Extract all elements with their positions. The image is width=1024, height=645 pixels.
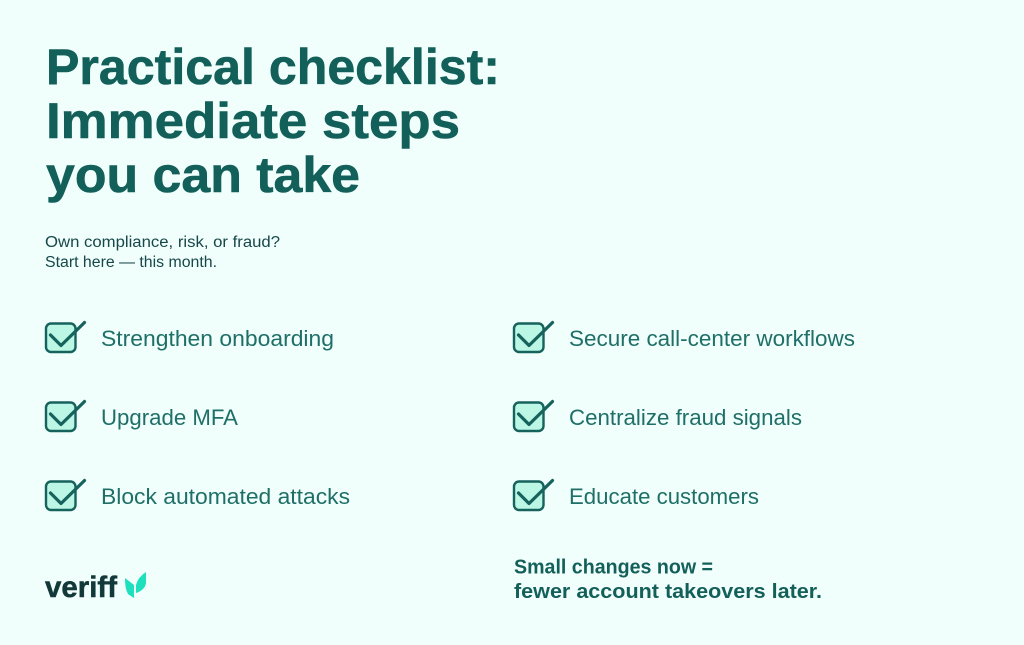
subtitle [45,234,280,271]
closing callout: Small changes now = [514,556,713,578]
checklist item: Upgrade MFA: Upgrade MFA [101,405,238,430]
checklist item: Educate customers: Educate customers [569,484,759,509]
title [46,39,500,203]
logo: veriff: veriff [45,571,118,604]
title: Immediate steps [46,93,460,149]
checklist item: Secure call-center workflows [514,322,855,352]
checklist item: Educate customers [514,480,759,510]
checklist item: Centralize fraud signals: Centralize fraud signals [569,405,802,430]
subtitle: Start here — this month. [45,254,217,271]
icon: veriff leaf [125,572,146,598]
title: you can take [46,147,360,203]
checklist item: Centralize fraud signals [514,402,802,431]
title: Practical checklist: [46,39,500,95]
checklist item: Secure call-center workflows: Secure call-center workflows [569,326,855,351]
closing callout: fewer account takeovers later. [514,580,822,603]
checklist item: Block automated attacks [46,480,350,510]
subtitle: Own compliance, risk, or fraud? [45,234,280,251]
checklist item: Strengthen onboarding [46,322,334,352]
checklist item: Strengthen onboarding: Strengthen onboarding [101,326,334,351]
checklist item: Block automated attacks: Block automated attacks [101,484,350,509]
checklist item: Upgrade MFA [46,402,238,431]
closing callout [514,556,822,603]
